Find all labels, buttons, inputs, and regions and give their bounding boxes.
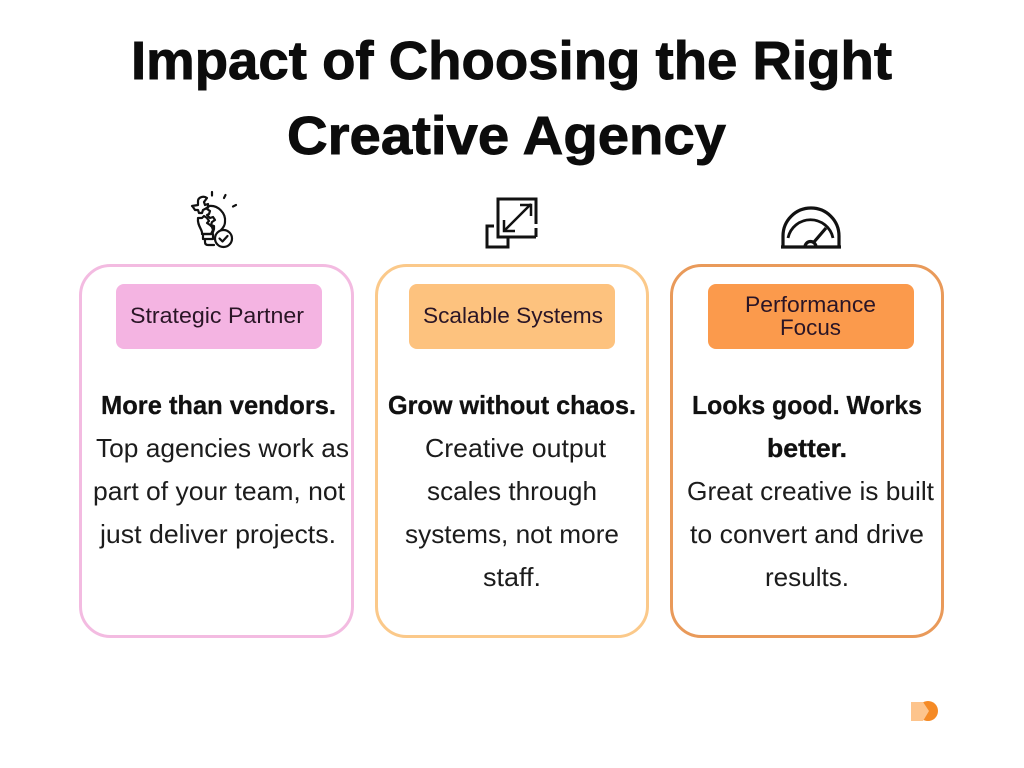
label: scalable systems: Scalable Systems xyxy=(423,303,603,328)
text: scalable systems description: Creative output xyxy=(425,433,607,463)
text: scalable systems description xyxy=(388,390,636,592)
text: strategic partner description: just deliver projects. xyxy=(99,519,336,549)
text: strategic partner description: part of your team, not xyxy=(93,476,346,506)
title: Creative Agency xyxy=(287,106,726,166)
icon: brand logo xyxy=(911,701,938,721)
text: scalable systems description: staff. xyxy=(483,562,541,592)
panel: performance focus xyxy=(672,266,942,636)
icon: puzzle light bulb with check xyxy=(192,192,236,247)
text: performance focus description: Looks good. Works xyxy=(692,390,922,420)
text: performance focus description: Great creative is built xyxy=(687,476,935,506)
title: Impact of Choosing the Right xyxy=(131,31,892,91)
label: performance focus: Focus xyxy=(780,315,841,340)
panel: strategic partner xyxy=(80,266,352,636)
text: strategic partner description xyxy=(93,390,349,549)
text: scalable systems description: systems, not more xyxy=(405,519,619,549)
text: performance focus description: better. xyxy=(767,433,847,463)
text: performance focus description: results. xyxy=(765,562,849,592)
text: scalable systems description: Grow without chaos. xyxy=(388,390,636,420)
label: scalable systems xyxy=(409,284,615,349)
panel: scalable systems xyxy=(376,266,648,636)
label: strategic partner xyxy=(116,284,322,349)
text: scalable systems description: scales through xyxy=(427,476,597,506)
text: performance focus description: to convert and drive xyxy=(690,519,924,549)
label: strategic partner: Strategic Partner xyxy=(130,303,305,328)
text: performance focus description xyxy=(687,390,935,592)
icon: resize arrows in squares xyxy=(487,199,536,247)
text: strategic partner description: More than vendors. xyxy=(101,390,336,420)
icon: speedometer gauge xyxy=(781,208,841,247)
label: performance focus: Performance xyxy=(745,292,876,317)
title xyxy=(131,31,892,166)
label: performance focus xyxy=(708,284,914,349)
text: strategic partner description: Top agencies work as xyxy=(96,433,349,463)
